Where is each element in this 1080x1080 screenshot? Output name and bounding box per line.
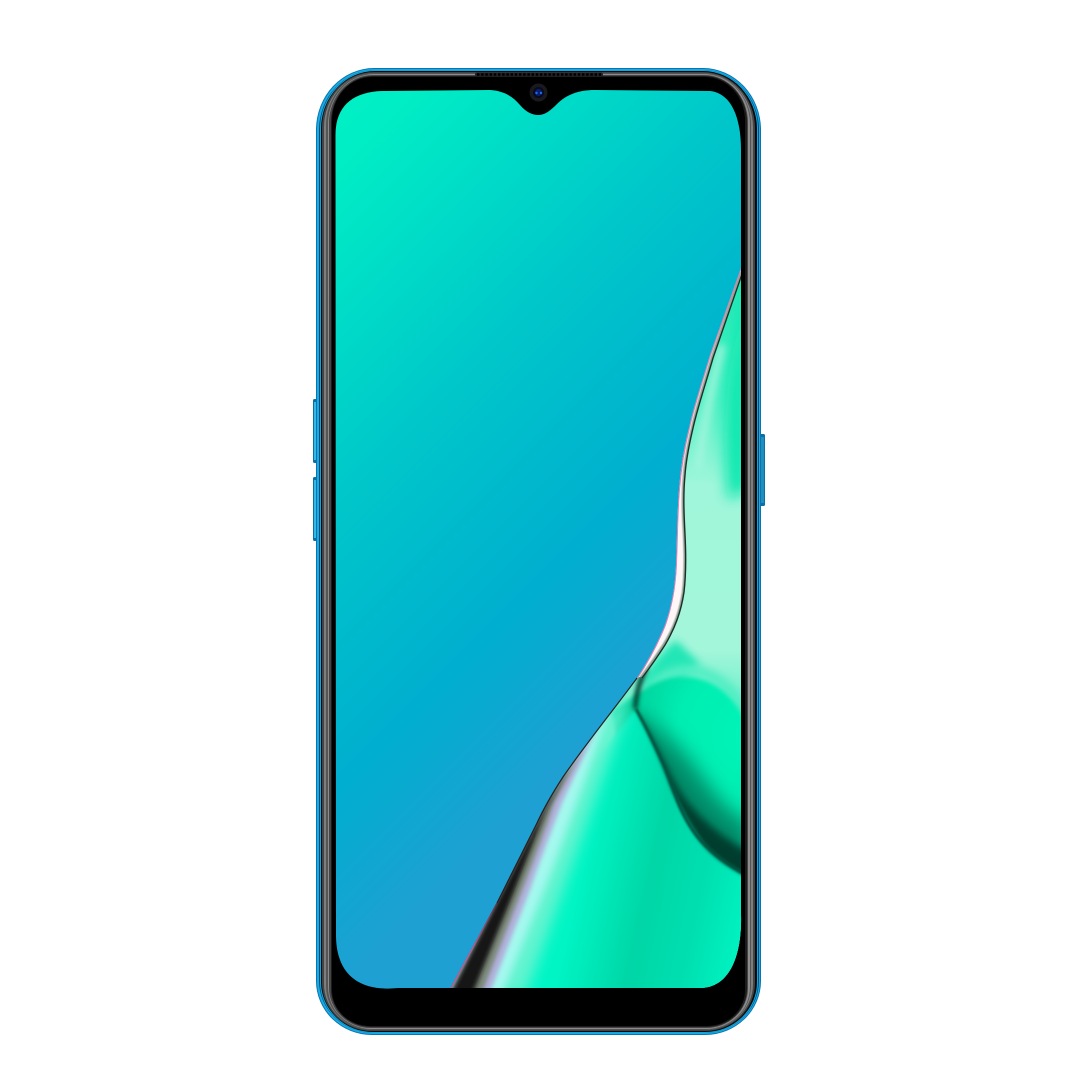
speaker grille xyxy=(475,72,603,76)
fold streak xyxy=(635,668,646,709)
green wave wedge xyxy=(452,268,742,988)
white fold soft shade xyxy=(641,272,741,677)
front camera xyxy=(530,84,548,102)
upper dark line xyxy=(642,274,742,678)
screen and front details xyxy=(336,72,742,989)
gray ribbon xyxy=(450,745,585,995)
medium shadow xyxy=(639,708,741,852)
green blob xyxy=(610,674,741,848)
screen wallpaper xyxy=(330,85,760,1000)
left side buttons xyxy=(313,399,316,541)
phone body frame xyxy=(316,68,761,1035)
blob glow band xyxy=(650,671,748,722)
pale streak xyxy=(698,345,722,470)
phone illustration xyxy=(313,68,765,1035)
lower green area xyxy=(440,710,750,995)
pink fold edge xyxy=(637,268,741,678)
blue-teal gradient background xyxy=(330,85,750,995)
right green glow xyxy=(725,290,748,500)
green transition near fold xyxy=(640,640,700,700)
dark edge line xyxy=(450,678,637,990)
dark shadow xyxy=(640,709,741,876)
white sheet fold xyxy=(637,268,743,678)
curved shadow core xyxy=(636,709,750,877)
right side button xyxy=(759,434,764,506)
soft mint ribbon xyxy=(450,695,625,995)
pink edge line lower xyxy=(450,903,497,990)
black ribbon xyxy=(450,765,570,995)
lilac ribbon xyxy=(450,728,597,995)
cyan ribbon xyxy=(450,708,610,995)
